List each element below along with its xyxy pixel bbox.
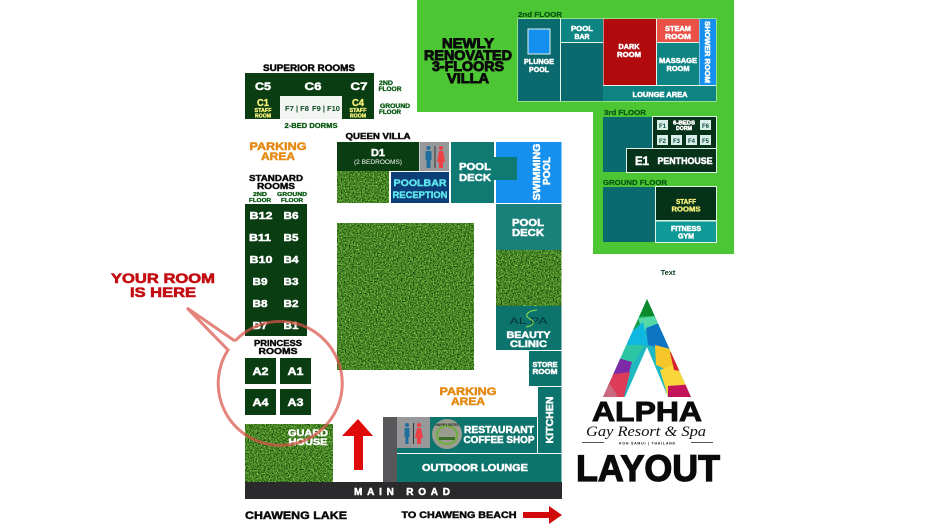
6-beds dorm: F6	[702, 124, 710, 130]
tagline: koh samui thailand: KOH SAMUI | THAILAND	[619, 442, 675, 446]
guard house	[245, 424, 333, 482]
label: 2-bed dorms: 2-BED DORMS	[284, 123, 338, 130]
heading: standard rooms: FLOOR	[249, 198, 271, 204]
dark room: ROOM	[617, 50, 641, 59]
rooms b1 to b12: B9	[252, 276, 268, 288]
6-beds dorm: F3	[673, 139, 681, 145]
floor labels: FLOOR	[379, 110, 402, 116]
6-beds dorm: F1	[659, 124, 667, 130]
label: chaweng lake: CHAWENG LAKE	[245, 510, 347, 522]
icon: happy bites logo: HAPPY BITES	[435, 423, 459, 427]
rooms c5 c6 c7: C6	[304, 81, 322, 93]
heading: princess rooms: PRINCESS	[254, 338, 302, 348]
steam room: ROOM	[665, 32, 691, 41]
title: newly renovated 3-floors villa: VILLA	[447, 70, 489, 86]
plunge pool: POOL	[529, 65, 549, 74]
6-beds dorm	[652, 116, 716, 148]
fitness gym: FITNESS	[671, 224, 701, 233]
ground floor plan	[603, 178, 716, 242]
beauty clinic: AL PA	[510, 316, 548, 326]
dark room: DARK	[618, 42, 640, 51]
heading: standard rooms: FLOOR	[281, 198, 303, 204]
callout bubble	[187, 308, 342, 445]
pool deck lower: POOL	[512, 218, 544, 229]
store room	[529, 351, 562, 386]
panel: princess rooms	[245, 338, 311, 415]
queen villa lawn	[337, 171, 389, 203]
label: parking area bottom: PARKING	[440, 386, 496, 398]
lounge area	[603, 86, 716, 101]
pool bar	[561, 19, 603, 42]
floor labels: 2ND	[379, 81, 394, 87]
2-bed dorm rooms f7 to f10: F7 | F8	[285, 106, 309, 113]
room c1 staff room: STAFF	[254, 108, 272, 114]
callout: your room is here: YOUR ROOM	[111, 271, 215, 286]
icon: happy bites logo	[432, 419, 462, 449]
label: parking area top	[250, 141, 306, 163]
6-beds dorm: 6-BEDS	[673, 120, 695, 126]
heading: standard rooms: 2ND	[253, 192, 267, 198]
room c1 staff room: C1	[257, 98, 269, 109]
icon: polygonal letter A	[603, 299, 691, 397]
ground floor plan: GROUND FLOOR	[603, 178, 668, 187]
room d1	[337, 142, 419, 171]
fitness gym: GYM	[678, 232, 694, 240]
room c4 staff room: C4	[352, 98, 364, 109]
title: newly renovated 3-floors villa: RENOVATED	[424, 47, 512, 63]
plunge pool: PLUNGE	[524, 57, 554, 66]
floor labels	[378, 81, 411, 116]
6-beds dorm: F2	[659, 139, 667, 145]
guard house: HOUSE	[288, 437, 328, 448]
rooms c5 c6 c7: C5	[255, 81, 271, 93]
2-bed dorm rooms f7 to f10	[280, 96, 342, 119]
steam room: STEAM	[665, 24, 691, 33]
heading: standard rooms	[249, 173, 307, 204]
floor labels: GROUND	[380, 104, 411, 110]
panel: newly renovated villa	[417, 0, 734, 254]
massage room: ROOM	[666, 64, 690, 73]
heading: queen villa: QUEEN VILLA	[346, 131, 410, 141]
title: newly renovated 3-floors villa	[424, 35, 512, 86]
central lawn	[337, 223, 474, 370]
rooms b1 to b12: B12	[250, 210, 273, 222]
swimming pool: POOL	[541, 156, 553, 185]
arrow: entrance up	[342, 419, 373, 470]
shower room: SHOWER ROOM	[703, 21, 710, 83]
staff rooms	[656, 186, 716, 220]
dark room	[604, 19, 656, 85]
pool bar: POOL	[571, 24, 593, 33]
panel: queen villa	[337, 131, 562, 250]
heading: standard rooms: ROOMS	[257, 181, 295, 191]
rooms b1 to b12	[249, 210, 299, 332]
room c4 staff room: ROOM	[350, 114, 366, 120]
wordmark: alpha: ALPHA	[592, 396, 702, 427]
beauty clinic: CLINIC	[510, 339, 547, 350]
label: restaurant coffee shop: RESTAURANT	[464, 425, 534, 436]
rooms b1 to b12: B8	[252, 298, 268, 310]
label: parking area top: AREA	[261, 151, 295, 163]
rooms b1 to b12: B5	[284, 232, 299, 244]
shower room	[700, 19, 716, 85]
callout: your room is here	[111, 271, 342, 445]
beauty clinic	[496, 306, 562, 350]
callout: your room is here: IS HERE	[130, 285, 196, 300]
kitchen	[538, 387, 562, 453]
title: newly renovated 3-floors villa: 3-FLOORS	[432, 58, 504, 74]
floor labels: FLOOR	[378, 87, 402, 93]
swimming pool	[496, 142, 562, 203]
rooms c5 c6 c7: C7	[350, 81, 368, 93]
fitness gym	[656, 221, 716, 242]
label: parking area bottom	[440, 386, 496, 408]
pool deck upper: DECK	[459, 173, 492, 184]
room c1 staff room	[254, 98, 272, 120]
panel: restaurant building	[383, 417, 562, 482]
main road	[245, 482, 562, 499]
room c4 staff room	[350, 98, 367, 120]
guard house: GUARD	[288, 428, 328, 439]
label: restaurant coffee shop	[464, 425, 535, 446]
steam room	[657, 19, 699, 42]
outdoor lounge: OUTDOOR LOUNGE	[422, 463, 528, 474]
label: parking area bottom: AREA	[451, 396, 485, 408]
rooms b1 to b12: B6	[284, 210, 299, 222]
swimming pool: SWIMMING	[531, 143, 543, 201]
logo: alpha gay resort and spa	[582, 295, 713, 446]
panel: superior rooms	[245, 63, 411, 130]
pool bar: BAR	[574, 32, 590, 41]
label: restaurant coffee shop: COFFEE SHOP	[464, 435, 535, 446]
poolbar reception: POOLBAR	[394, 178, 447, 189]
poolbar reception: RECEPTION	[392, 190, 448, 201]
icon: restrooms	[397, 417, 430, 448]
plunge pool	[518, 19, 560, 101]
massage room	[657, 43, 699, 85]
rooms b1 to b12: B2	[284, 298, 299, 310]
e1 penthouse: PENTHOUSE	[658, 156, 712, 166]
room a3: A3	[288, 397, 304, 409]
rooms b1 to b12: B7	[252, 320, 268, 332]
pool deck upper: POOL	[459, 162, 491, 173]
title: newly renovated 3-floors villa: NEWLY	[442, 35, 495, 51]
tagline: gay resort and spa: Gay Resort & Spa	[586, 424, 706, 440]
pool deck upper	[451, 142, 517, 203]
6-beds dorm: F5	[702, 139, 710, 145]
2nd floor plan	[518, 10, 716, 102]
e1 penthouse: E1	[635, 154, 649, 168]
6-beds dorm: DORM	[676, 126, 692, 132]
rooms b1 to b12: B10	[250, 254, 273, 266]
poolbar reception	[391, 172, 449, 203]
staff rooms: ROOMS	[672, 204, 700, 214]
rooms c5 c6 c7	[255, 81, 368, 93]
label: to chaweng beach: TO CHAWENG BEACH	[402, 510, 516, 520]
rooms b1 to b12: B4	[284, 254, 299, 266]
room c1 staff room: ROOM	[255, 114, 271, 120]
e1 penthouse	[626, 148, 716, 172]
room a2: A2	[252, 366, 268, 378]
heading: princess rooms: ROOMS	[258, 346, 298, 356]
3rd floor plan	[603, 108, 716, 172]
room d1: D1	[371, 148, 385, 159]
3rd floor plan: 3rd FLOOR	[604, 108, 647, 117]
icon: restrooms	[420, 142, 449, 171]
2nd floor plan: 2nd FLOOR	[518, 10, 563, 19]
room a1: A1	[288, 366, 304, 378]
lounge area: LOUNGE AREA	[632, 90, 688, 99]
staff rooms: STAFF	[676, 197, 696, 206]
outdoor lounge	[397, 454, 562, 482]
rooms b1 to b12: B11	[249, 232, 271, 244]
heading: superior rooms: SUPERIOR ROOMS	[263, 63, 355, 73]
massage room: MASSAGE	[659, 56, 697, 65]
store room: ROOM	[532, 367, 558, 376]
room d1: (2 BEDROOMS)	[354, 160, 402, 166]
heading: standard rooms: GROUND	[277, 192, 307, 198]
main road: MAIN ROAD	[354, 487, 450, 498]
panel: standard rooms	[245, 173, 307, 336]
2-bed dorm rooms f7 to f10: F9 | F10	[312, 106, 340, 113]
heading: standard rooms: STANDARD	[249, 173, 303, 183]
pool deck lower	[496, 204, 562, 250]
store room: STORE	[532, 360, 558, 369]
rooms b1 to b12: B3	[284, 276, 299, 288]
heading: layout: LAYOUT	[576, 448, 720, 489]
beauty clinic: BEAUTY	[506, 330, 551, 341]
pool deck lower: DECK	[512, 228, 545, 239]
6-beds dorm: F4	[688, 139, 696, 145]
room a4: A4	[252, 397, 270, 409]
arrow: to beach	[523, 506, 562, 524]
room c4 staff room: STAFF	[350, 108, 367, 114]
heading: princess rooms	[254, 338, 302, 356]
rooms b1 to b12: B1	[284, 320, 299, 332]
label: parking area top: PARKING	[250, 141, 306, 153]
east lawn	[496, 250, 562, 306]
kitchen: KITCHEN	[545, 396, 556, 444]
placeholder text label: Text	[661, 268, 676, 277]
tagline: koh samui thailand	[582, 442, 713, 446]
